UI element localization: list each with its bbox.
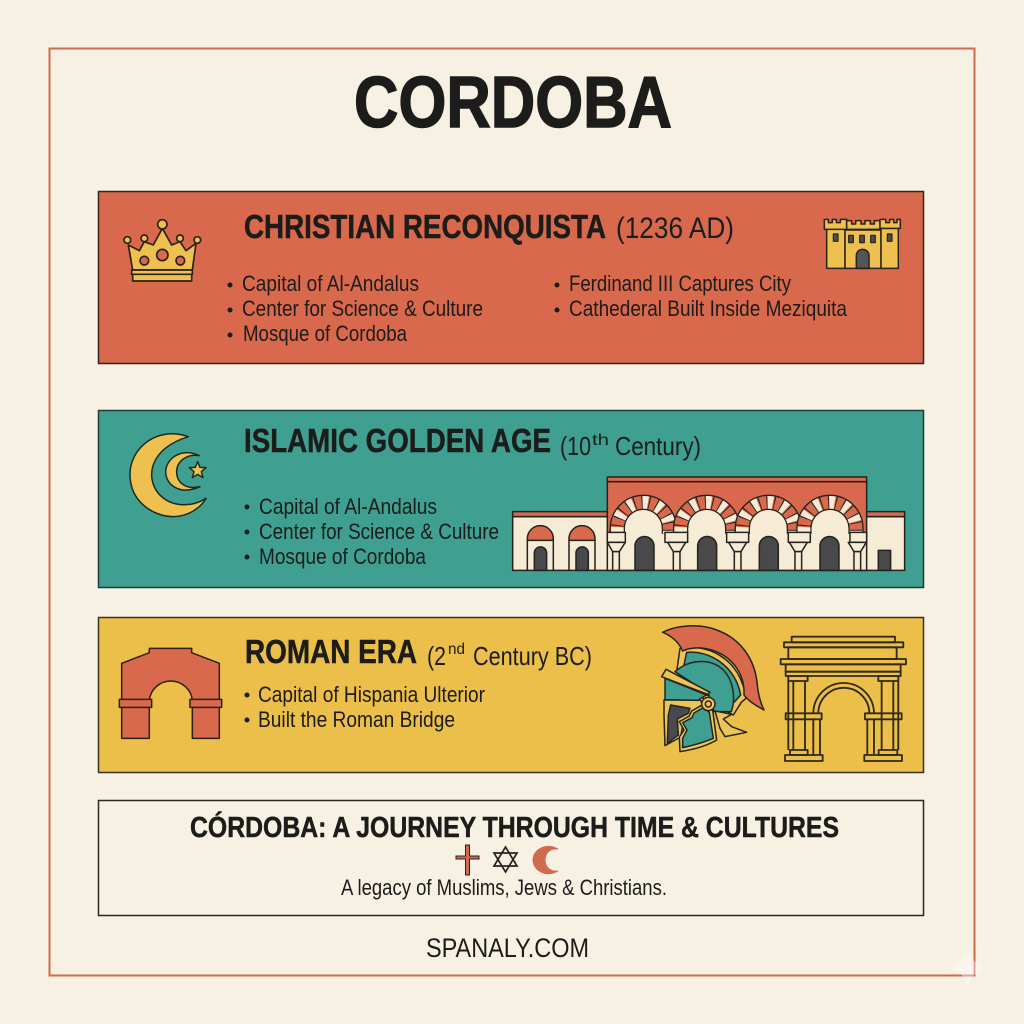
icon: star of David [494,847,517,872]
panel: summary [98,800,924,916]
heading: Islamic Golden Age: th [592,432,609,449]
heading: Islamic Golden Age: (10 [560,431,591,461]
icon: crescent and star [130,434,206,517]
icon: crescent [533,846,558,874]
icon: watermark sparkle [944,946,992,990]
icon: Roman bridge arch [119,648,222,738]
heading: Roman Era: ROMAN ERA [245,633,417,670]
bullet list: Capital of Al-Andalus [259,494,437,519]
panel: Christian Reconquista [98,192,924,364]
heading: Islamic Golden Age: Century) [615,431,701,461]
heading: Christian Reconquista: (1236 AD) [616,212,734,245]
bullet list: Mosque of Cordoba [259,544,427,569]
heading: Roman Era: (2 [427,641,446,671]
bullet list: left column: Capital of Al-Andalus [242,271,419,296]
icon: Roman helmet [662,626,764,752]
bullet list: Center for Science & Culture [259,519,499,544]
bullet list: right column: Ferdinand III Captures City [569,271,791,296]
panel: Islamic Golden Age [98,410,924,588]
heading: Roman Era: Century BC) [473,641,592,671]
heading: journey through time: CÓRDOBA: A JOURNEY THROUGH TIME & CULTURES [190,810,839,844]
heading: Christian Reconquista: CHRISTIAN RECONQUISTA [244,208,606,245]
bullet list [244,494,499,569]
bullet list: left column [228,271,483,346]
bullet list: right column [554,271,848,321]
icon: castle [824,219,900,268]
icon: cross [456,845,479,875]
website credit: SPANALY.COM [426,933,589,963]
tagline: A legacy of Muslims, Jews & Christians. [341,875,667,900]
heading: Islamic Golden Age: ISLAMIC GOLDEN AGE [244,422,551,459]
bullet list: right column: Cathederal Built Inside Meziquita [569,296,848,321]
bullet list: Built the Roman Bridge [258,707,455,732]
illustration: Mosque of Cordoba arches [513,477,905,570]
bullet list: Capital of Hispania Ulterior [258,682,485,707]
panel: Roman Era [98,618,924,772]
bullet list: left column: Mosque of Cordoba [243,321,408,346]
bullet list: left column: Center for Science & Culture [242,296,483,321]
bullet list [244,682,485,732]
icon: crown [124,220,201,281]
heading: Roman Era [245,633,592,671]
title: CORDOBA [354,63,672,143]
icon: triumphal arch [781,637,906,761]
heading: Roman Era: nd [448,641,465,658]
